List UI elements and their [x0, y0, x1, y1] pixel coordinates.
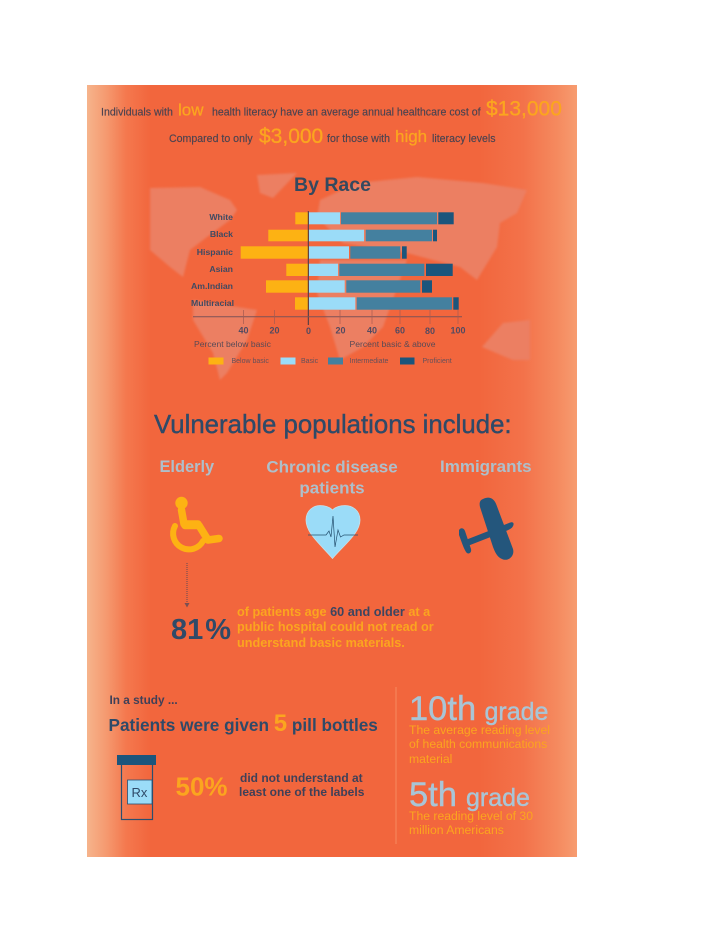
statistic: 81 percent: 81%: [171, 614, 231, 646]
chart title: By Race: By Race: [294, 174, 371, 196]
stat: 5th grade: million Americans: [409, 823, 504, 837]
label: Chronic disease patients: [266, 458, 398, 498]
axes: [193, 211, 462, 325]
text: patients given 5 pill bottles: Patients were given 5 pill bottles: [108, 710, 378, 737]
label: Immigrants: Immigrants: [440, 457, 532, 476]
label: Chronic disease patients: patients: [299, 478, 365, 498]
heading: cost comparison: $13,000: [486, 98, 562, 120]
heading: cost comparison: low: [178, 100, 204, 120]
text: 81 percent description: [237, 605, 434, 650]
icon: pill bottle: Rx: [132, 785, 148, 800]
axis tick labels: 100: [450, 326, 466, 336]
stat: 5th grade: 5th: [409, 776, 457, 814]
axis tick labels: 0: [306, 326, 311, 336]
row labels: White: [209, 212, 233, 222]
world map backdrop: [150, 173, 530, 380]
row labels: Am.Indian: [191, 281, 233, 291]
text: 81 percent description: understand basic materials.: [237, 636, 405, 650]
heading: cost comparison: literacy levels: [432, 133, 496, 145]
heading: vulnerable populations: Vulnerable populations include:: [154, 411, 512, 439]
icon: airplane: [459, 498, 514, 560]
axis tick labels: [238, 326, 466, 336]
text: 81 percent description: public hospital could not read or: [237, 620, 434, 634]
icon: pill bottle: [117, 755, 156, 820]
legend: Below basic: [232, 358, 269, 365]
axis tick labels: 60: [395, 326, 405, 336]
statistic: 50 percent: 50%: [176, 772, 228, 802]
heading: cost comparison: for those with: [327, 133, 390, 145]
axis titles: Percent below basic: [194, 339, 272, 349]
axis titles: [194, 339, 436, 349]
icon: heart with heartbeat: [306, 506, 360, 558]
text: did not understand: did not understand at: [240, 771, 363, 785]
label: Elderly: Elderly: [160, 458, 215, 476]
row labels: Multiracial: [191, 298, 234, 308]
text: did not understand: least one of the labels: [239, 785, 365, 799]
axis titles: Percent basic & above: [350, 339, 436, 349]
arrow: elderly to statistic: [184, 563, 190, 608]
stat: 10th grade: grade: [484, 698, 548, 726]
heading: cost comparison: Compared to only: [169, 133, 253, 145]
heading: cost comparison: high: [395, 127, 427, 146]
legend: Proficient: [422, 358, 452, 365]
axis tick labels: 40: [238, 326, 249, 336]
basic bars: [309, 212, 364, 310]
below basic bars: [241, 212, 308, 310]
heading: cost comparison: health literacy have an average annual healthcare cost of: [212, 106, 481, 118]
poster background: [87, 85, 577, 857]
stat: 10th grade: 10th: [409, 690, 476, 728]
axis tick labels: 20: [269, 326, 280, 336]
row labels: Asian: [209, 264, 233, 274]
divider: [395, 687, 397, 844]
stat: 10th grade: material: [409, 752, 452, 766]
heading: cost comparison: Individuals with: [101, 106, 173, 118]
row labels: [191, 212, 234, 308]
heading: cost comparison: $3,000: [259, 125, 323, 148]
row labels: Black: [210, 229, 233, 239]
row labels: Hispanic: [197, 247, 233, 257]
text: 81 percent description: of patients age 60 and older at a: [237, 605, 431, 619]
text: In a study: In a study ...: [110, 693, 178, 707]
stat: 10th grade: of health communications: [409, 737, 547, 751]
stat: 10th grade: The average reading level: [409, 723, 550, 737]
icon: wheelchair: [173, 497, 219, 549]
stat: 5th grade: [409, 776, 533, 837]
heading: cost comparison: [101, 98, 562, 148]
intermediate bars: [339, 212, 452, 310]
text: did not understand: [239, 771, 365, 799]
axis tick labels: 20: [335, 326, 346, 336]
proficient bars: [402, 212, 459, 310]
axis tick labels: 80: [425, 326, 435, 336]
legend: Basic: [301, 358, 319, 365]
stat: 10th grade: [409, 690, 550, 766]
stat: 5th grade: grade: [466, 784, 530, 812]
stat: 5th grade: The reading level of 30: [409, 809, 533, 823]
label: Chronic disease patients: Chronic disease: [266, 458, 398, 476]
chart: literacy by race stacked bars: [191, 211, 466, 365]
legend: Intermediate: [350, 358, 389, 365]
legend: [208, 358, 452, 365]
axis tick labels: 40: [367, 326, 377, 336]
